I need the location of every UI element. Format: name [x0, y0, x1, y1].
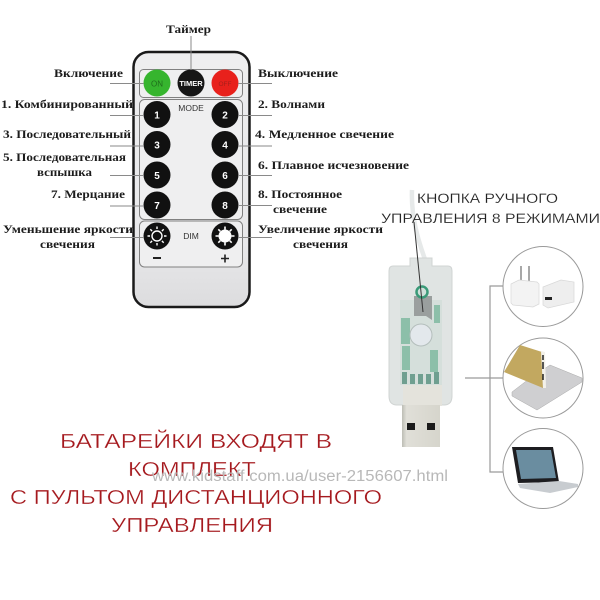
button: timer — [178, 70, 204, 96]
mode label: MODE — [178, 103, 204, 113]
label: mode 3: 3. Последовательный — [3, 129, 131, 141]
adapter with usb port — [543, 280, 574, 308]
button: off: OFF — [218, 81, 232, 88]
mode button panel — [140, 100, 242, 220]
button: 5: 5 — [154, 171, 160, 182]
callout lines — [110, 36, 272, 238]
minus sign — [153, 257, 161, 259]
button: 4: 4 — [222, 140, 228, 152]
button: dim down — [144, 222, 170, 250]
label: mode 7: 7. Мерцание — [51, 189, 125, 201]
top button panel — [140, 70, 242, 98]
button: 5 — [144, 162, 170, 188]
power bank slots — [542, 355, 544, 380]
note line 2: КОМПЛЕКТ — [128, 459, 256, 481]
green ring button — [416, 286, 428, 298]
connector lines — [465, 286, 503, 472]
plus sign — [221, 254, 229, 262]
button: 8 — [212, 192, 238, 218]
heading line 2: УПРАВЛЕНИЯ 8 РЕЖИМАМИ — [381, 211, 600, 226]
label: dim up: Увеличение яркости — [258, 224, 383, 236]
dark chip — [414, 296, 432, 320]
plug hole right — [427, 423, 435, 430]
button: on — [144, 70, 170, 96]
button: timer: TIMER — [179, 79, 203, 88]
laptop base — [518, 481, 578, 493]
label: mode 4: 4. Медленное свечение — [255, 129, 394, 141]
label: mode 6: 6. Плавное исчезновение — [258, 160, 409, 172]
remote body — [134, 52, 250, 307]
button: 6: 6 — [222, 171, 228, 182]
gold power bank — [504, 345, 543, 388]
button: 7: 7 — [154, 201, 160, 212]
button: 2: 2 — [222, 110, 228, 122]
button: 4 — [212, 131, 238, 158]
label: dim down line 2: свечения — [40, 239, 95, 251]
usb port — [545, 297, 552, 300]
usb plug — [402, 405, 440, 447]
button: on: ON — [151, 80, 163, 88]
wire — [412, 190, 426, 262]
note line 1: БАТАРЕЙКИ ВХОДЯТ В — [60, 429, 332, 453]
dim button panel — [140, 221, 242, 267]
circle: power bank — [503, 338, 583, 418]
adapter prongs — [520, 266, 530, 281]
button: off — [212, 70, 238, 96]
thin wire — [414, 222, 423, 312]
screen image — [516, 450, 556, 479]
usb controller — [389, 190, 452, 447]
button: 3: 3 — [154, 140, 160, 152]
metal collar — [403, 385, 442, 406]
button: 8: 8 — [222, 201, 228, 212]
label: off: Выключение — [258, 68, 338, 80]
silver power bank — [512, 365, 582, 410]
button: 1: 1 — [154, 110, 160, 122]
red note — [10, 429, 382, 537]
note line 3: С ПУЛЬТОМ ДИСТАНЦИОННОГО — [10, 487, 382, 509]
circuit board — [400, 300, 442, 385]
label: mode 1: 1. Комбинированный — [1, 99, 133, 111]
label: dim down: Уменьшение яркости — [3, 224, 133, 236]
label: timer: Таймер — [166, 24, 211, 36]
plug hole left — [407, 423, 415, 430]
gold power bank side — [541, 351, 546, 388]
button: 2 — [212, 101, 238, 128]
remote control — [134, 52, 250, 307]
label: mode 5: 5. Последовательная — [3, 152, 126, 164]
label: mode 2: 2. Волнами — [258, 99, 325, 111]
note line 4: УПРАВЛЕНИЯ — [111, 515, 273, 537]
button: 3 — [144, 131, 170, 158]
label: on: Включение — [54, 68, 123, 80]
button: dim up — [212, 222, 238, 250]
green board patches — [401, 305, 440, 372]
led — [410, 324, 432, 346]
label: dim up line 2: свечения — [293, 239, 348, 251]
label: mode 8: 8. Постоянное — [258, 189, 342, 201]
button: 1 — [144, 101, 170, 128]
circle: wall adapters — [503, 246, 583, 326]
button: 6 — [212, 162, 238, 188]
heading line 1: КНОПКА РУЧНОГО — [417, 191, 558, 206]
bottom components — [402, 372, 439, 384]
button: 7 — [144, 192, 170, 218]
adapter with prongs — [511, 280, 539, 307]
heading: manual control — [381, 191, 600, 226]
circle: laptop — [503, 428, 583, 508]
laptop screen — [512, 447, 559, 483]
dim label: DIM — [183, 231, 199, 241]
label: mode 8 line 2: свечение — [273, 204, 327, 216]
watermark: www.kidstaff.com.ua/user-2156607.html — [151, 468, 448, 485]
clear case — [389, 258, 452, 405]
label: mode 5 line 2: вспышка — [37, 167, 92, 179]
